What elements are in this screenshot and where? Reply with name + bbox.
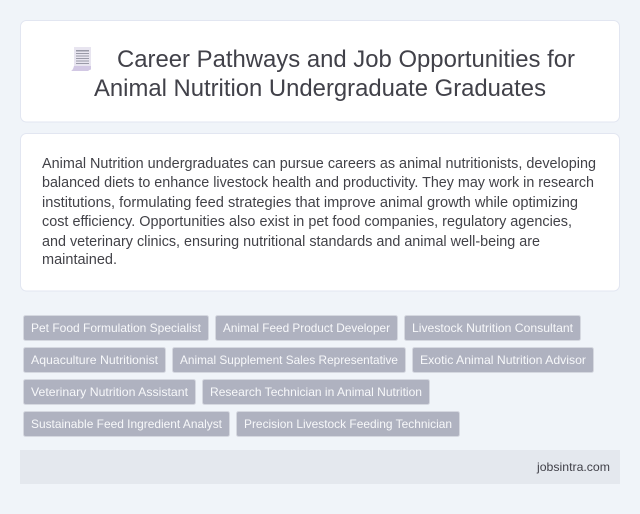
tag: Animal Feed Product Developer xyxy=(223,321,390,335)
tag xyxy=(24,412,230,436)
tag xyxy=(216,316,398,340)
tag: Research Technician in Animal Nutrition xyxy=(210,385,422,399)
tag xyxy=(412,348,594,372)
footer: jobsintra.com xyxy=(536,460,610,474)
tag: Precision Livestock Feeding Technician xyxy=(244,417,452,431)
tag: Animal Supplement Sales Representative xyxy=(180,353,398,367)
text block: description xyxy=(42,156,596,268)
tag: Veterinary Nutrition Assistant xyxy=(31,385,189,399)
tag: Exotic Animal Nutrition Advisor xyxy=(420,353,586,367)
panel: description xyxy=(20,134,620,291)
icon: paper scroll xyxy=(71,47,91,71)
text block: description: balanced diets to enhance livestock health and productivity. They may work in research xyxy=(42,175,594,191)
footer xyxy=(20,450,620,484)
text block: description: and veterinary clinics, ensuring nutritional standards and animal well-being are xyxy=(42,234,540,250)
title: Career Pathways and Job Opportunities for xyxy=(117,46,575,73)
panel: title card xyxy=(20,20,620,122)
title: Animal Nutrition Undergraduate Graduates xyxy=(94,75,546,102)
tag xyxy=(24,316,208,340)
tag list: job titles xyxy=(24,316,594,436)
text block: description: maintained. xyxy=(42,252,117,268)
title xyxy=(94,46,575,102)
tag: Livestock Nutrition Consultant xyxy=(412,321,574,335)
tag xyxy=(24,380,196,404)
tag: Sustainable Feed Ingredient Analyst xyxy=(31,417,223,431)
tag xyxy=(236,412,460,436)
tag: Pet Food Formulation Specialist xyxy=(31,321,202,335)
text block: description: institutions, formulating feed strategies that improve animal growth while optimizing xyxy=(42,195,578,211)
tag xyxy=(202,380,430,404)
text block: description: Animal Nutrition undergraduates can pursue careers as animal nutritionists, developing xyxy=(42,156,596,172)
tag: Aquaculture Nutritionist xyxy=(31,353,159,367)
tag xyxy=(404,316,580,340)
tag xyxy=(24,348,166,372)
tag xyxy=(172,348,406,372)
text block: description: cost efficiency. Opportunities also exist in pet food companies, regulatory agencies, xyxy=(42,214,572,230)
